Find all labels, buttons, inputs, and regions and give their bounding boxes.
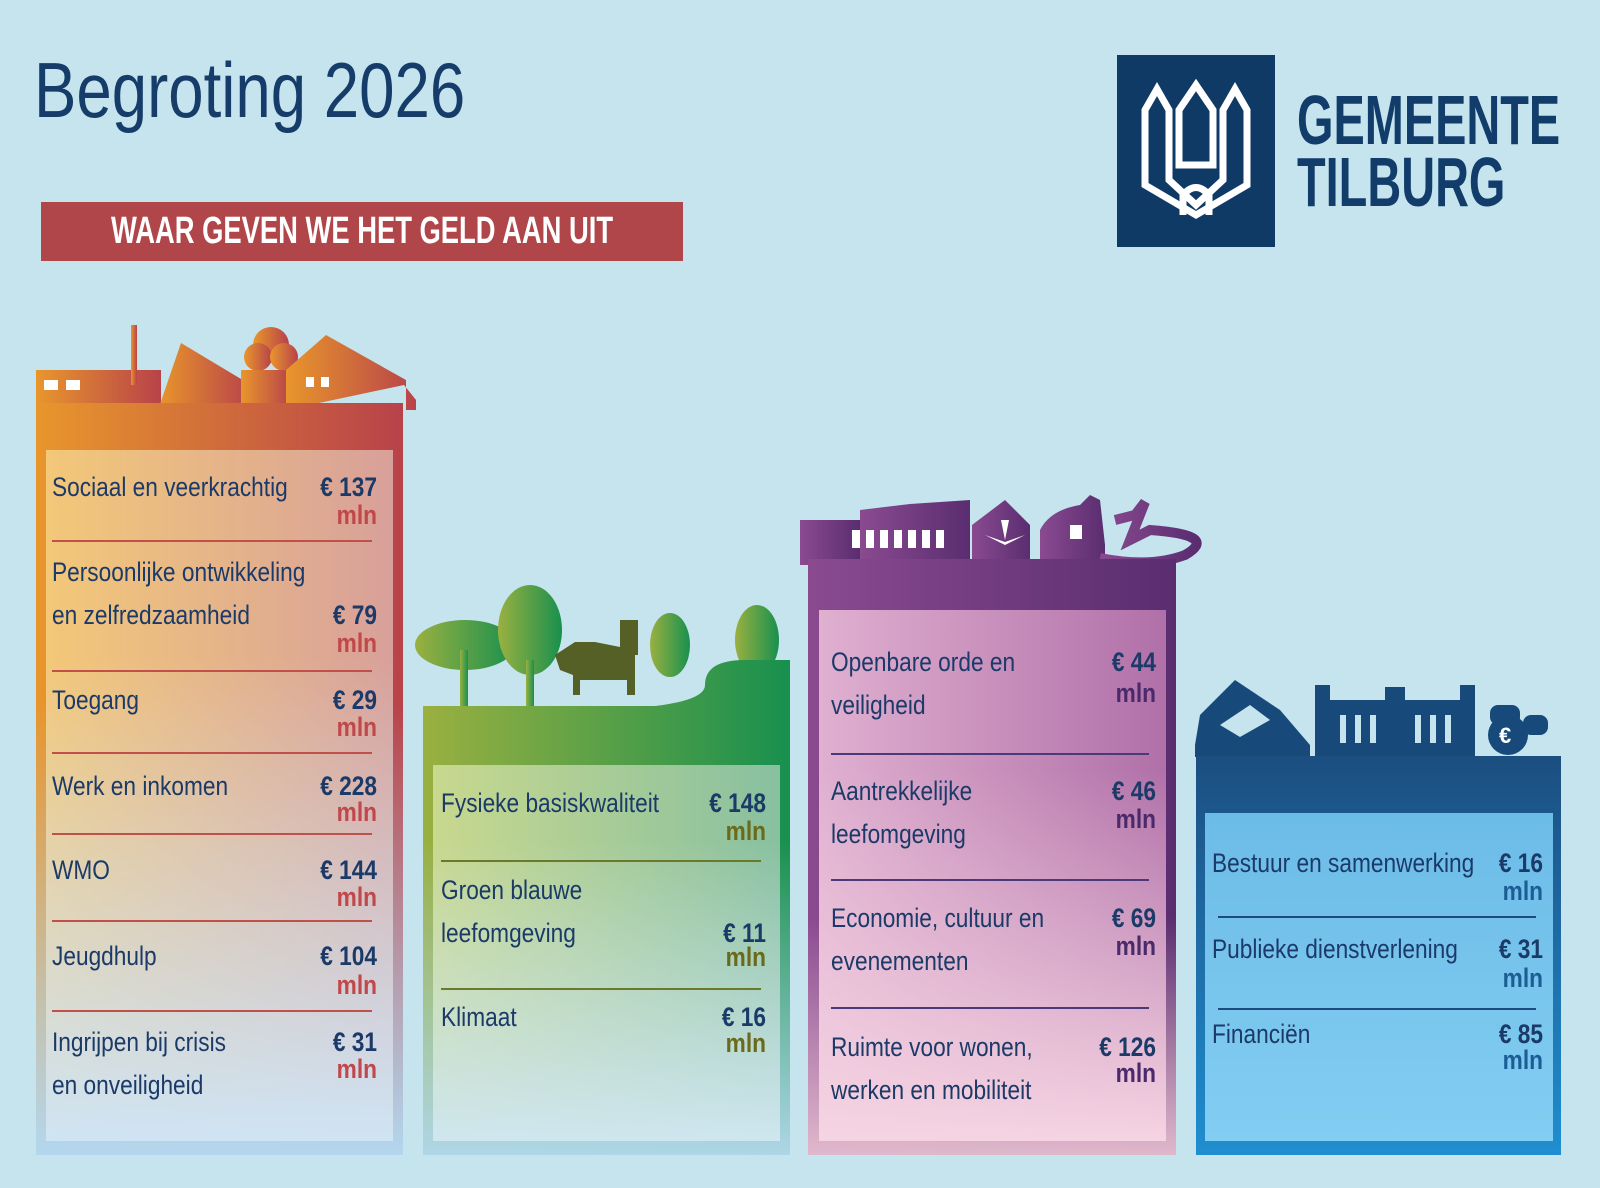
text: Ingrijpen bij crisis xyxy=(52,1027,226,1057)
panel: column 3 xyxy=(800,495,1202,1155)
text: € 228 xyxy=(320,771,377,801)
text: mln xyxy=(1503,876,1543,906)
body 3 xyxy=(808,559,1176,1155)
text: Sociaal en veerkrachtig xyxy=(52,472,288,502)
body 1 xyxy=(36,403,403,1155)
text: Economie, cultuur en xyxy=(831,903,1044,933)
text: € 44 xyxy=(1112,647,1156,677)
panel: column 1 xyxy=(36,325,416,1155)
text: mln xyxy=(1503,1045,1543,1075)
logo mark xyxy=(1117,55,1275,247)
text: mln xyxy=(1503,963,1543,993)
panel: column 4 xyxy=(1195,680,1561,1155)
text: Toegang xyxy=(52,685,139,715)
text: mln xyxy=(726,816,766,846)
text: leefomgeving xyxy=(441,918,576,948)
text: veiligheid xyxy=(831,690,926,720)
body 2 xyxy=(423,706,790,1155)
text: Jeugdhulp xyxy=(52,941,157,971)
text: mln xyxy=(1116,678,1156,708)
rows column 2 xyxy=(441,788,766,1058)
rows column 3 xyxy=(831,647,1156,1105)
rows column 1 xyxy=(52,472,377,1100)
text: mln xyxy=(1116,804,1156,834)
text: € 79 xyxy=(333,600,377,630)
text: Aantrekkelijke xyxy=(831,776,972,806)
inner panel 4 xyxy=(1205,813,1553,1141)
text: leefomgeving xyxy=(831,819,966,849)
icon: skyline 4 xyxy=(1195,680,1548,757)
logo text xyxy=(1297,81,1560,221)
text: mln xyxy=(1116,1058,1156,1088)
text: en onveiligheid xyxy=(52,1070,203,1100)
panel: column 2 xyxy=(415,585,790,1155)
icon: skyline 2 xyxy=(415,585,790,706)
text: en zelfredzaamheid xyxy=(52,600,250,630)
text: € 31 xyxy=(333,1027,377,1057)
text: € 85 xyxy=(1499,1019,1543,1049)
text: Groen blauwe xyxy=(441,875,582,905)
inner panel 1 xyxy=(46,450,393,1141)
text: € 16 xyxy=(722,1002,766,1032)
text: € 69 xyxy=(1112,903,1156,933)
logo text: TILBURG xyxy=(1297,143,1505,221)
text: mln xyxy=(337,1054,377,1084)
icon: skyline 3 xyxy=(800,495,1202,565)
text: mln xyxy=(726,1028,766,1058)
rows column 4 xyxy=(1212,848,1543,1075)
text: Ruimte voor wonen, xyxy=(831,1032,1033,1062)
text: mln xyxy=(726,942,766,972)
text: € 29 xyxy=(333,685,377,715)
text: mln xyxy=(337,628,377,658)
text: Persoonlijke ontwikkeling xyxy=(52,557,305,587)
text: Publieke dienstverlening xyxy=(1212,934,1458,964)
text: mln xyxy=(337,970,377,1000)
text: € 46 xyxy=(1112,776,1156,806)
text: Fysieke basiskwaliteit xyxy=(441,788,659,818)
text: € 126 xyxy=(1099,1032,1156,1062)
text: mln xyxy=(1116,931,1156,961)
text: WMO xyxy=(52,855,110,885)
logo xyxy=(1117,55,1560,247)
icon: skyline 4: € xyxy=(1499,723,1511,748)
text: € 104 xyxy=(320,941,377,971)
text: mln xyxy=(337,797,377,827)
body 4 xyxy=(1196,756,1561,1155)
text: Werk en inkomen xyxy=(52,771,228,801)
text: € 11 xyxy=(723,918,766,948)
text: € 137 xyxy=(320,472,377,502)
text: mln xyxy=(337,882,377,912)
text: werken en mobiliteit xyxy=(831,1075,1031,1105)
banner xyxy=(41,202,683,261)
text: Bestuur en samenwerking xyxy=(1212,848,1474,878)
text: € 148 xyxy=(709,788,766,818)
text: mln xyxy=(337,712,377,742)
text: evenementen xyxy=(831,946,968,976)
banner: WAAR GEVEN WE HET GELD AAN UIT xyxy=(111,210,613,252)
text: mln xyxy=(337,500,377,530)
logo text: GEMEENTE xyxy=(1297,81,1560,159)
text: Openbare orde en xyxy=(831,647,1015,677)
title: Begroting 2026 xyxy=(34,46,465,134)
text: Financiën xyxy=(1212,1019,1310,1049)
inner panel 2 xyxy=(433,765,780,1141)
inner panel 3 xyxy=(819,610,1166,1141)
text: € 31 xyxy=(1499,934,1543,964)
text: € 144 xyxy=(320,855,377,885)
text: Klimaat xyxy=(441,1002,517,1032)
icon: skyline 1 xyxy=(36,325,416,410)
text: € 16 xyxy=(1499,848,1543,878)
